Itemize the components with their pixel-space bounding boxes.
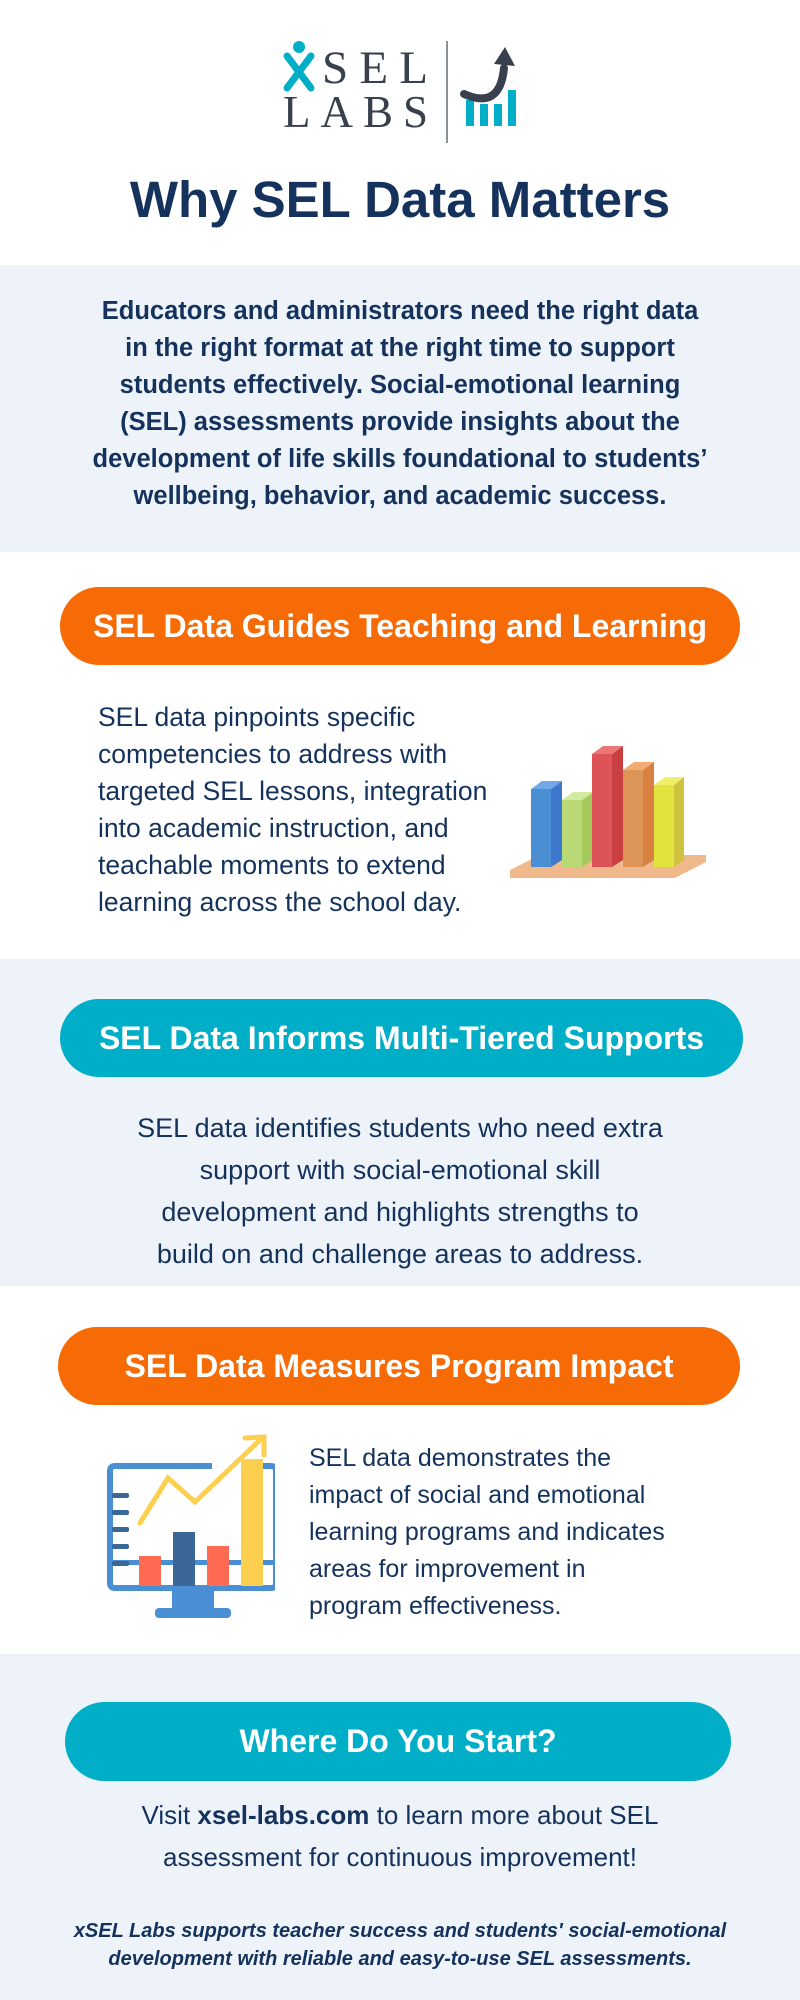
band: multi-tiered <box>0 959 800 1286</box>
pill: multi-tiered: SEL Data Informs Multi-Tiered Supports <box>99 1020 704 1056</box>
text: program impact: areas for improvement in <box>309 1555 586 1583</box>
pill: guides teaching: SEL Data Guides Teaching and Learning <box>93 608 707 644</box>
band: where do you start <box>0 1654 800 2000</box>
intro text <box>93 297 707 510</box>
text: guides teaching: competencies to address with <box>98 739 447 769</box>
intro text: students effectively. Social-emotional learning <box>120 371 680 399</box>
text: guides teaching: learning across the school day. <box>98 887 461 917</box>
pill: where do you start <box>65 1702 731 1781</box>
footer note <box>73 1920 726 1970</box>
text: program impact: program effectiveness. <box>309 1592 561 1620</box>
text: multi-tiered <box>137 1113 663 1269</box>
text: guides teaching: targeted SEL lessons, integration <box>98 776 487 806</box>
text: program impact: learning programs and indicates <box>309 1518 665 1546</box>
text: visit <box>142 1800 658 1872</box>
pill: program impact: SEL Data Measures Program Impact <box>125 1348 673 1384</box>
logo: SEL <box>322 42 428 94</box>
icon: person x <box>287 41 311 88</box>
text: guides teaching: SEL data pinpoints specific <box>98 702 415 732</box>
icon: 3d bar chart <box>510 746 706 878</box>
pill: multi-tiered <box>60 999 743 1077</box>
pill: where do you start: Where Do You Start? <box>239 1723 557 1759</box>
intro text: development of life skills foundational to students’ <box>93 445 707 473</box>
pill: program impact <box>58 1327 740 1405</box>
text: multi-tiered: SEL data identifies students who need extra <box>137 1113 663 1143</box>
pill: guides teaching <box>60 587 740 665</box>
text: visit: assessment for continuous improvement! <box>163 1842 637 1872</box>
text: program impact: SEL data demonstrates the <box>309 1444 611 1472</box>
intro text: in the right format at the right time to support <box>125 334 675 362</box>
footer note: xSEL Labs supports teacher success and students' social-emotional <box>74 1920 726 1942</box>
text: guides teaching: teachable moments to extend <box>98 850 446 880</box>
text: program impact <box>309 1444 665 1620</box>
text: guides teaching: into academic instruction, and <box>98 813 449 843</box>
intro text: wellbeing, behavior, and academic success. <box>134 482 666 510</box>
logo <box>283 41 516 143</box>
text: program impact: impact of social and emotional <box>309 1481 645 1509</box>
text: guides teaching <box>98 702 487 917</box>
icon: monitor chart <box>107 1434 275 1618</box>
text: multi-tiered: support with social-emotional skill <box>200 1155 600 1185</box>
text: multi-tiered: development and highlights strengths to <box>161 1197 639 1227</box>
logo: LABS <box>283 87 428 137</box>
intro text: Educators and administrators need the right data <box>102 297 698 325</box>
intro text: (SEL) assessments provide insights about the <box>120 408 680 436</box>
footer note: development with reliable and easy-to-use SEL assessments. <box>108 1948 692 1970</box>
text: multi-tiered: build on and challenge areas to address. <box>157 1239 643 1269</box>
text: visit: Visit xsel-labs.com to learn more about SEL <box>142 1800 658 1830</box>
title: Why SEL Data Matters <box>130 171 670 228</box>
intro band <box>0 265 800 552</box>
